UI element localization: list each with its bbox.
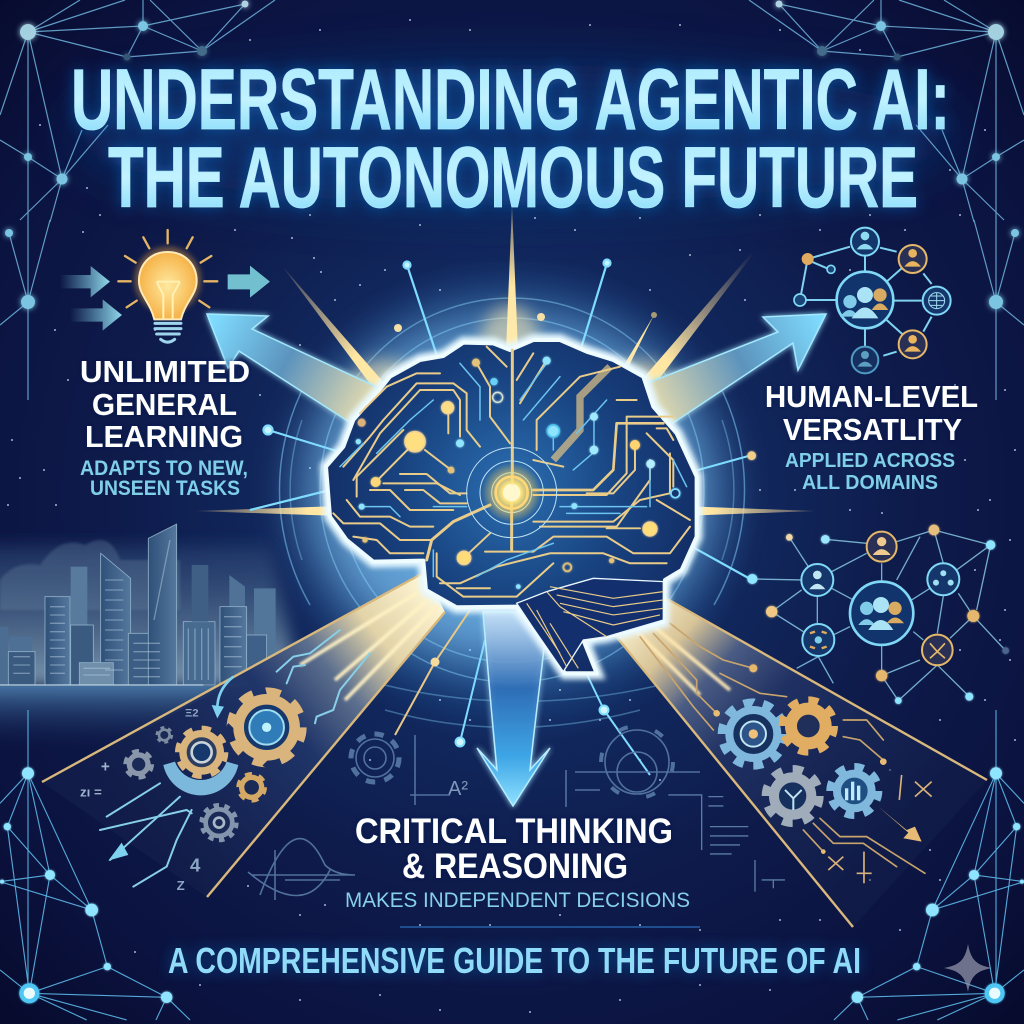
large gold gear [233, 693, 301, 761]
small steel gear [126, 752, 151, 777]
formula graph [248, 839, 355, 900]
text block: unlimited general learning [80, 354, 250, 500]
gears cluster left [80, 630, 370, 893]
curved arrow [217, 677, 233, 710]
faint equation lines [668, 795, 785, 892]
bulb base [155, 323, 181, 342]
person node top [851, 228, 879, 256]
analytics gear right [830, 767, 878, 815]
math symbols left: + [101, 759, 110, 776]
footer divider [400, 926, 700, 928]
node: team [927, 563, 959, 595]
circuit traces right [640, 623, 925, 873]
text block: critical thinking and reasoning: & REASONING [402, 847, 628, 886]
brain body [326, 340, 697, 673]
node: tools [922, 635, 953, 665]
small arrow two [70, 299, 122, 331]
small nodes lower [747, 451, 1009, 704]
axis lines [410, 735, 700, 807]
bulb rays [118, 230, 217, 307]
city buildings [0, 524, 276, 685]
title backdrop glow [72, 65, 952, 205]
node: gold person [867, 532, 897, 562]
formula text: A² [448, 778, 468, 800]
network icon: upper right [794, 228, 951, 373]
beam: lower left [42, 572, 445, 897]
text block: unlimited general learning: GENERAL [92, 387, 237, 422]
text block: critical thinking and reasoning: CRITICAL THINKING [355, 812, 673, 851]
brain [326, 340, 697, 673]
trace nodes [713, 664, 887, 854]
gears cluster right [640, 623, 932, 892]
gears cluster left: Z [177, 878, 185, 893]
beam: lower right [615, 596, 987, 927]
gold circuit traces [333, 347, 690, 597]
clouds [0, 540, 180, 610]
steel gear [202, 806, 236, 839]
circuit traces left [100, 630, 370, 887]
small arrow one [60, 266, 110, 297]
footer tagline: A COMPREHENSIVE GUIDE TO THE FUTURE OF AI [168, 940, 861, 981]
water reflection [0, 686, 225, 760]
glowing nodes [356, 357, 680, 589]
blue gear arc [163, 762, 238, 795]
text block: unlimited general learning: ADAPTS TO NEW, [80, 457, 248, 480]
hub [837, 272, 893, 328]
faint gear left [351, 734, 399, 782]
central core [482, 463, 542, 523]
steel gear right [766, 769, 819, 823]
person node gold upper [899, 245, 927, 273]
text block: unlimited general learning: UNLIMITED [80, 354, 250, 389]
corner network top left [0, 0, 275, 400]
title [71, 52, 950, 226]
gold gear right [783, 701, 834, 751]
icon: sparkle watermark [944, 944, 992, 992]
text block: critical thinking and reasoning [345, 812, 690, 912]
icon: light bulb with arrows [60, 230, 270, 342]
node: focus [802, 624, 834, 656]
large blue gear right [723, 703, 784, 765]
orbit rings around core [467, 448, 557, 538]
text block: human-level versatility: ALL DOMAINS [802, 472, 938, 494]
person node gold lower [899, 330, 927, 358]
math symbols right [828, 775, 932, 883]
cerebellum [517, 578, 663, 672]
city skyline [0, 524, 300, 760]
text block: human-level versatility: VERSATLITY [783, 412, 962, 447]
gears cluster left: 4 [190, 855, 201, 876]
corner network bottom left [0, 710, 190, 1020]
bulb glass [139, 252, 197, 319]
gears cluster left: zı = [80, 785, 102, 800]
brain halo [326, 340, 697, 673]
small gold gear [239, 775, 264, 800]
lower rays [456, 640, 650, 775]
upper left arrow [207, 314, 400, 445]
center downward arrow [477, 610, 550, 806]
arrow heads [108, 705, 224, 861]
faint gear right [601, 726, 673, 798]
text block: unlimited general learning: UNSEEN TASKS [90, 477, 240, 500]
text block: human-level versatility: HUMAN-LEVEL [765, 379, 978, 414]
gears cluster left: Ξ2 [185, 708, 199, 720]
gold fold band [553, 367, 610, 460]
small arrow three [228, 266, 270, 298]
faint thinking diagrams [248, 726, 700, 900]
node: professional [801, 564, 833, 596]
corner network top right [749, 0, 1024, 400]
text block: human-level versatility: APPLIED ACROSS [785, 450, 955, 472]
corner network bottom right [834, 710, 1024, 1020]
concentric orbit arcs [279, 298, 745, 728]
person node bottom [852, 347, 878, 373]
globe node [923, 287, 951, 315]
small nodes [794, 253, 835, 306]
text block: unlimited general learning: LEARNING [85, 419, 243, 454]
text block: critical thinking and reasoning: MAKES INDEPENDENT DECISIONS [345, 889, 690, 912]
tiny steel gear [157, 728, 172, 742]
hub lower [850, 582, 913, 645]
text block: human-level versatility [765, 379, 978, 494]
network icon: lower right [747, 451, 1009, 704]
blue circuit traces [340, 363, 687, 577]
medium gold gear [179, 730, 224, 775]
gold arrow [878, 807, 922, 842]
filament [157, 282, 180, 318]
light burst rays [195, 205, 815, 775]
upper right arrow [625, 314, 826, 445]
